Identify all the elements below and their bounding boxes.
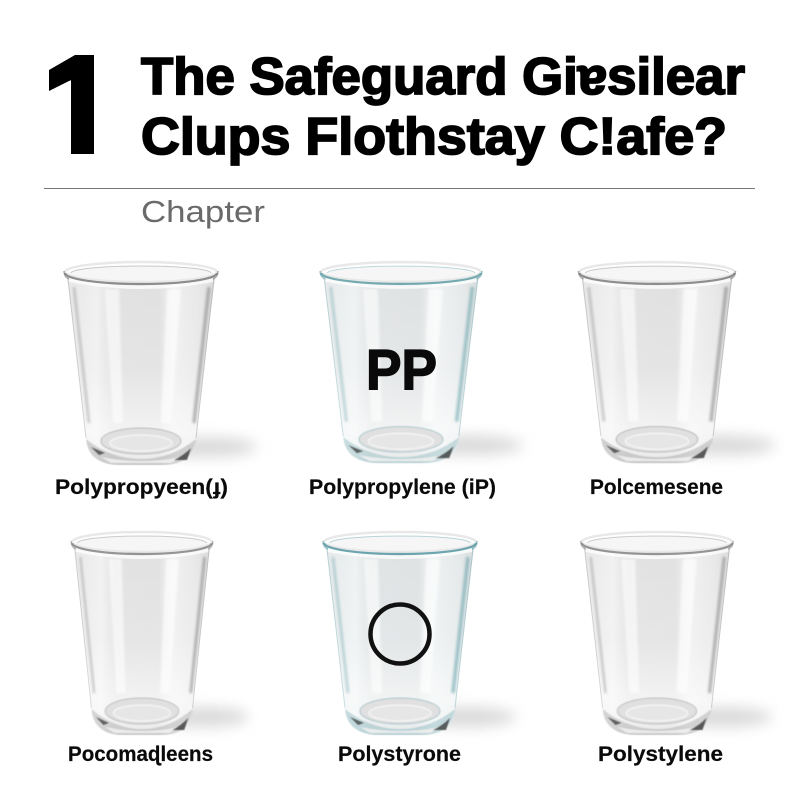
title: The Safeguard Giɐsilear (141, 48, 745, 106)
glass 4 with label: Pocomaɖleens (68, 742, 213, 766)
chapter number: 1 (37, 30, 114, 184)
glass 5 circle with label (323, 532, 516, 766)
glass 5 circle with label: Polystyrone (338, 742, 461, 766)
glass 6 with label (581, 532, 772, 766)
glass 2 PP with label (309, 262, 523, 499)
glass 4 with label (68, 532, 249, 766)
glass 6 with label: Polystylene (598, 742, 723, 766)
title: Clups Flothstay C!afe? (141, 108, 727, 166)
glass 1 with label: Polypropyeen(ɟ) (55, 475, 228, 499)
glass 1 with label (55, 262, 257, 499)
PP mark: PP (366, 338, 437, 402)
subtitle: Chapter (141, 194, 265, 229)
glass 3 with label: Polcemesene (590, 475, 723, 499)
glass 2 PP with label: Polypropylene (iP) (309, 475, 496, 499)
title (141, 48, 745, 166)
glass 3 with label (578, 262, 775, 499)
circle mark (370, 604, 430, 664)
